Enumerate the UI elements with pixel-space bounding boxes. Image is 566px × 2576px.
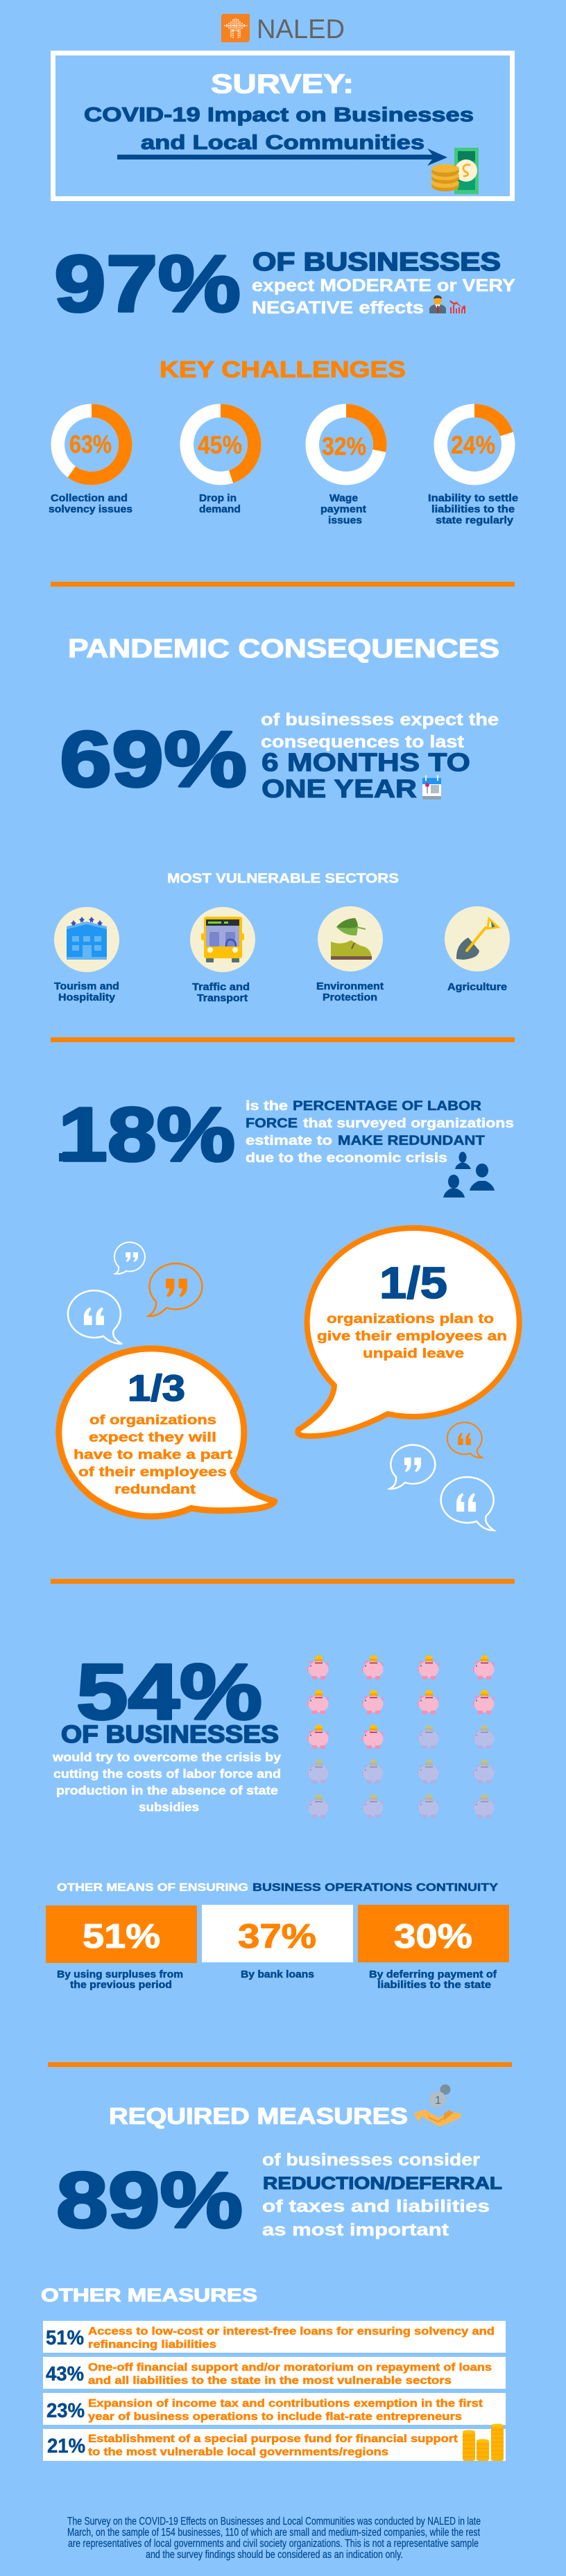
icon: shovel xyxy=(445,906,510,971)
measure row: 51%: refinancing liabilities xyxy=(88,2339,216,2351)
donut chart: 24%: state regularly xyxy=(436,515,514,526)
stat text: cutting the costs of labor force and xyxy=(53,1767,281,1781)
icon: coin stacks xyxy=(463,2424,504,2461)
sector label: Traffic and xyxy=(192,981,250,993)
sector label xyxy=(192,981,250,1004)
stat card: 30%: liabilities to the state xyxy=(377,1979,491,1991)
callout text: expect they will xyxy=(89,1430,216,1445)
donut chart: 24%: Inability to settle xyxy=(428,492,518,504)
fraction: 1/3 xyxy=(128,1368,185,1409)
stat text: would try to overcome the crisis by xyxy=(52,1750,281,1764)
donut chart: 32%: 32% xyxy=(322,432,366,460)
subtitle: and Local Communities xyxy=(141,132,424,154)
donut chart: 63%: 63% xyxy=(69,430,112,458)
callout: 1/3 xyxy=(59,1349,275,1516)
heading: pandemic consequences: PANDEMIC CONSEQUENCES xyxy=(68,634,499,664)
heading: key challenges: KEY CHALLENGES xyxy=(160,356,406,382)
donut chart: 24%: liabilities to the xyxy=(431,503,515,515)
stat text: NEGATIVE effects xyxy=(252,298,424,318)
donut chart: 63%: solvency issues xyxy=(49,503,132,515)
heading: other means xyxy=(57,1882,498,1894)
donut chart: 63% xyxy=(49,410,132,515)
measure row: 43%: and all liabilities to the state in the most vulnerable sectors xyxy=(88,2375,452,2387)
sector label: Transport xyxy=(197,992,248,1004)
sector label: Environment xyxy=(316,980,384,992)
heading: other means: BUSINESS OPERATIONS CONTINUITY xyxy=(252,1882,498,1894)
measure row: 21% xyxy=(43,2429,506,2461)
icon: people xyxy=(443,1152,495,1198)
speech bubbles: white quote left xyxy=(68,1290,122,1344)
sector label: Tourism and xyxy=(54,980,119,992)
icon: hand with coins: 1 xyxy=(435,2095,441,2107)
callout text: redundant xyxy=(114,1483,196,1497)
donut chart: 45%: 45% xyxy=(198,431,242,459)
stat text: due to the economic crisis xyxy=(246,1151,447,1166)
measure row: 51% xyxy=(43,2321,506,2353)
icon: falling chart xyxy=(449,300,465,313)
measure row: 23%: year of business operations to include flat-rate entrepreneurs xyxy=(88,2411,462,2423)
faded piggy banks xyxy=(307,1724,495,1818)
stat text xyxy=(246,1099,514,1166)
donut chart: 32% xyxy=(312,410,380,526)
stat card: 37%: 37% xyxy=(238,1918,316,1955)
footnote: are representatives of local governments and civil society organizations. This is not a representative sample xyxy=(68,2538,479,2550)
measure row: 51%: 51% xyxy=(46,2327,84,2349)
stat text: 6 MONTHS TO xyxy=(261,748,470,777)
big number: 54% xyxy=(76,1648,262,1736)
stat text xyxy=(252,276,515,318)
stat text: as most important xyxy=(262,2220,449,2240)
bubble xyxy=(59,1349,275,1516)
measure row: 21%: to the most vulnerable local governments/regions xyxy=(88,2446,388,2458)
footnote: and the survey findings should be considered as an indication only. xyxy=(146,2549,403,2561)
big number: 97% xyxy=(54,239,241,329)
measure row: 43%: 43% xyxy=(46,2363,84,2385)
measure row: 43%: One-off financial support and/or moratorium on repayment of loans xyxy=(88,2362,492,2374)
donut chart: 63%: Collection and xyxy=(51,492,128,504)
logo mark xyxy=(221,14,250,42)
sector label: Hospitality xyxy=(58,992,116,1003)
stat text: ONE YEAR xyxy=(261,775,417,803)
filled piggy banks xyxy=(307,1655,495,1749)
stat card: 51% xyxy=(46,1905,197,1991)
big number: 69% xyxy=(60,716,247,804)
callout text: of organizations xyxy=(89,1413,216,1428)
speech bubbles: white quote middle xyxy=(390,1445,435,1489)
big number: 18% xyxy=(58,1092,235,1177)
stat text xyxy=(262,2150,502,2240)
sector: traffic and transport xyxy=(190,907,255,1004)
stat: 69% xyxy=(60,710,499,804)
stat heading: OF BUSINESSES xyxy=(252,248,501,276)
stat card: 37% xyxy=(202,1905,353,1980)
donut chart: 24% xyxy=(428,410,518,526)
stat text: that surveyed organizations xyxy=(303,1116,514,1131)
title frame xyxy=(53,53,512,198)
stat text: is the xyxy=(246,1099,288,1114)
icon: money and coins xyxy=(431,148,479,194)
stat card: 51%: By using surpluses from xyxy=(57,1969,183,1980)
fraction: 1/5 xyxy=(379,1258,447,1308)
big number: 89% xyxy=(56,2156,243,2245)
sector label xyxy=(54,980,119,1003)
stat card: 37%: By bank loans xyxy=(241,1969,314,1980)
donut chart: 45% xyxy=(187,410,255,515)
measure row: 21%: Establishment of a special purpose fund for financial support xyxy=(88,2433,458,2445)
callout text xyxy=(74,1413,233,1497)
numeral foot xyxy=(59,1153,102,1161)
stat text: of businesses consider xyxy=(262,2150,480,2170)
stat: 18% xyxy=(58,1092,514,1198)
stat text: FORCE xyxy=(246,1116,298,1131)
icon: leaf and shoe xyxy=(318,906,383,971)
arrow xyxy=(117,148,447,166)
callout: 1/5 xyxy=(298,1228,520,1436)
stat text: expect MODERATE or VERY xyxy=(252,276,515,295)
sector: agriculture xyxy=(445,906,510,993)
stat: 97% xyxy=(54,239,515,329)
donut chart: 45%: Drop in xyxy=(199,492,237,504)
donut chart: 32%: issues xyxy=(328,515,362,526)
bubble xyxy=(298,1228,520,1436)
speech bubbles: orange quote bottom xyxy=(447,1422,482,1458)
stat text xyxy=(52,1750,281,1814)
subtitle xyxy=(84,104,474,154)
subtitle: COVID-19 Impact on Businesses xyxy=(84,104,474,126)
donut chart: 45%: demand xyxy=(199,503,241,515)
stat card: 30%: 30% xyxy=(394,1918,472,1955)
callout text: have to make a part xyxy=(74,1448,233,1462)
heading: most vulnerable sectors: MOST VULNERABLE SECTORS xyxy=(167,872,399,886)
sector label: Protection xyxy=(323,992,377,1003)
stat text: estimate to xyxy=(246,1134,332,1148)
stat: 89% xyxy=(56,2150,502,2245)
measure row: 23% xyxy=(43,2393,506,2425)
sector: tourism and hospitality xyxy=(54,907,119,1003)
footnote xyxy=(67,2516,481,2561)
speech bubbles: white quote bottom xyxy=(441,1477,494,1530)
stat text: REDUCTION/DEFERRAL xyxy=(263,2174,502,2193)
stat text: PERCENTAGE OF LABOR xyxy=(293,1099,481,1114)
sector: environment protection xyxy=(316,906,384,1003)
stat card: 51%: the previous period xyxy=(70,1979,172,1991)
icon: bus xyxy=(190,907,255,972)
title panel xyxy=(53,53,512,198)
sector label xyxy=(316,980,384,1003)
stat card: 30%: By deferring payment of xyxy=(369,1969,497,1980)
stat text: subsidies xyxy=(139,1800,199,1814)
heading: required measures: REQUIRED MEASURES xyxy=(109,2103,408,2129)
donut chart: 32%: payment xyxy=(320,503,366,515)
measure row: 23%: 23% xyxy=(46,2400,85,2422)
stat heading: OF BUSINESSES xyxy=(61,1721,279,1748)
callout text: unpaid leave xyxy=(363,1347,464,1361)
icon: hotel xyxy=(54,907,119,972)
logo: NALED xyxy=(221,14,345,44)
icon: businessman xyxy=(429,295,446,313)
speech bubbles: orange quote top xyxy=(148,1263,202,1316)
stat text: consequences to last xyxy=(261,732,465,752)
heading: other means: OTHER MEANS OF ENSURING xyxy=(57,1882,248,1894)
icon: calendar xyxy=(422,775,441,799)
heading: other measures: OTHER MEASURES xyxy=(41,2285,257,2306)
stat card: 30% xyxy=(358,1905,509,1991)
measure row: 51%: Access to low-cost or interest-free loans for ensuring solvency and xyxy=(88,2326,495,2337)
stat text: of businesses expect the xyxy=(261,710,499,729)
stat text: MAKE REDUNDANT xyxy=(338,1134,485,1148)
measure row: 43% xyxy=(43,2357,506,2389)
callout text: of their employees xyxy=(78,1465,227,1480)
callout text: organizations plan to xyxy=(327,1312,494,1326)
measure row: 21%: 21% xyxy=(47,2435,85,2457)
icon grid: piggy banks xyxy=(307,1655,495,1818)
logo wordmark: NALED xyxy=(257,15,345,44)
sector label: Agriculture xyxy=(447,981,507,993)
speech bubbles: white quote top xyxy=(114,1243,145,1274)
icon: hand with coins xyxy=(414,2084,461,2127)
measure row: 23%: Expansion of income tax and contributions exemption in the first xyxy=(88,2398,483,2410)
stat: 54% xyxy=(52,1648,281,1814)
stat text: of taxes and liabilities xyxy=(262,2197,490,2216)
donut chart: 24%: 24% xyxy=(451,431,495,459)
stat card: 51%: 51% xyxy=(83,1918,160,1955)
donut chart: 32%: Wage xyxy=(329,492,358,504)
title: SURVEY: SURVEY: xyxy=(211,69,354,99)
callout text: give their employees an xyxy=(317,1329,507,1344)
stat text xyxy=(261,710,499,803)
stat text: production in the absence of state xyxy=(56,1783,278,1797)
callout text xyxy=(317,1312,507,1361)
